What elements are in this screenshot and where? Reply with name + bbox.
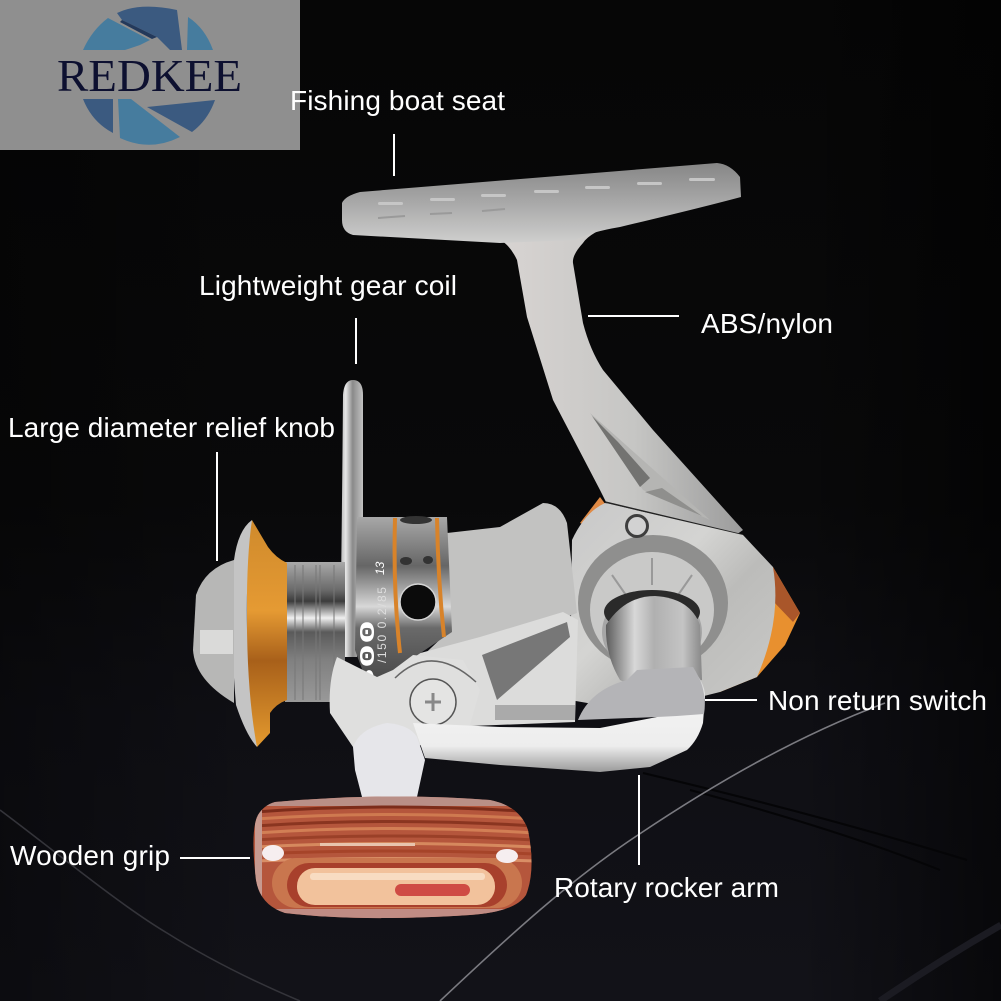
- stem: [500, 222, 743, 560]
- fishing reel: [193, 163, 800, 925]
- silver spool lip: [232, 520, 257, 747]
- logo: aperture circle: [83, 7, 215, 145]
- gearbox body: [570, 503, 775, 712]
- drag knob: [193, 560, 234, 703]
- spool drum: 13: [373, 561, 387, 575]
- side frame hump: [413, 503, 577, 665]
- spool shaft: [285, 562, 345, 702]
- wooden grip: [253, 796, 532, 918]
- label: large diameter relief knob: Large diameter relief knob: [8, 412, 335, 443]
- logo: wordmark: REDKEE: [57, 50, 242, 101]
- label: wooden grip: Wooden grip: [10, 840, 170, 871]
- frame spar with window: [377, 612, 578, 728]
- spool drum: 500: [358, 620, 381, 692]
- label: ABS/nylon: ABS/nylon: [701, 308, 833, 339]
- bail arm: [340, 380, 363, 657]
- reel seat plate: [342, 163, 741, 243]
- gold spool rim: [247, 520, 287, 747]
- main screw: [409, 678, 457, 726]
- rotor knob: [578, 535, 728, 674]
- spool drum: /150 0.2/85: [375, 587, 389, 663]
- label: non return switch: Non return switch: [768, 685, 987, 716]
- folding bracket: [330, 655, 480, 747]
- label: rotary rocker arm: Rotary rocker arm: [554, 872, 779, 903]
- rear orange cap: [580, 497, 800, 692]
- label: fishing boat seat: Fishing boat seat: [290, 85, 505, 116]
- handle post: [353, 723, 425, 797]
- chrome nut: [606, 596, 702, 690]
- logo panel: [0, 0, 300, 150]
- stem inset panel: [590, 413, 743, 535]
- rocker arm: [413, 667, 705, 772]
- spool drum: [355, 516, 452, 692]
- label: lightweight gear coil: Lightweight gear coil: [199, 270, 457, 301]
- screw: [625, 514, 649, 538]
